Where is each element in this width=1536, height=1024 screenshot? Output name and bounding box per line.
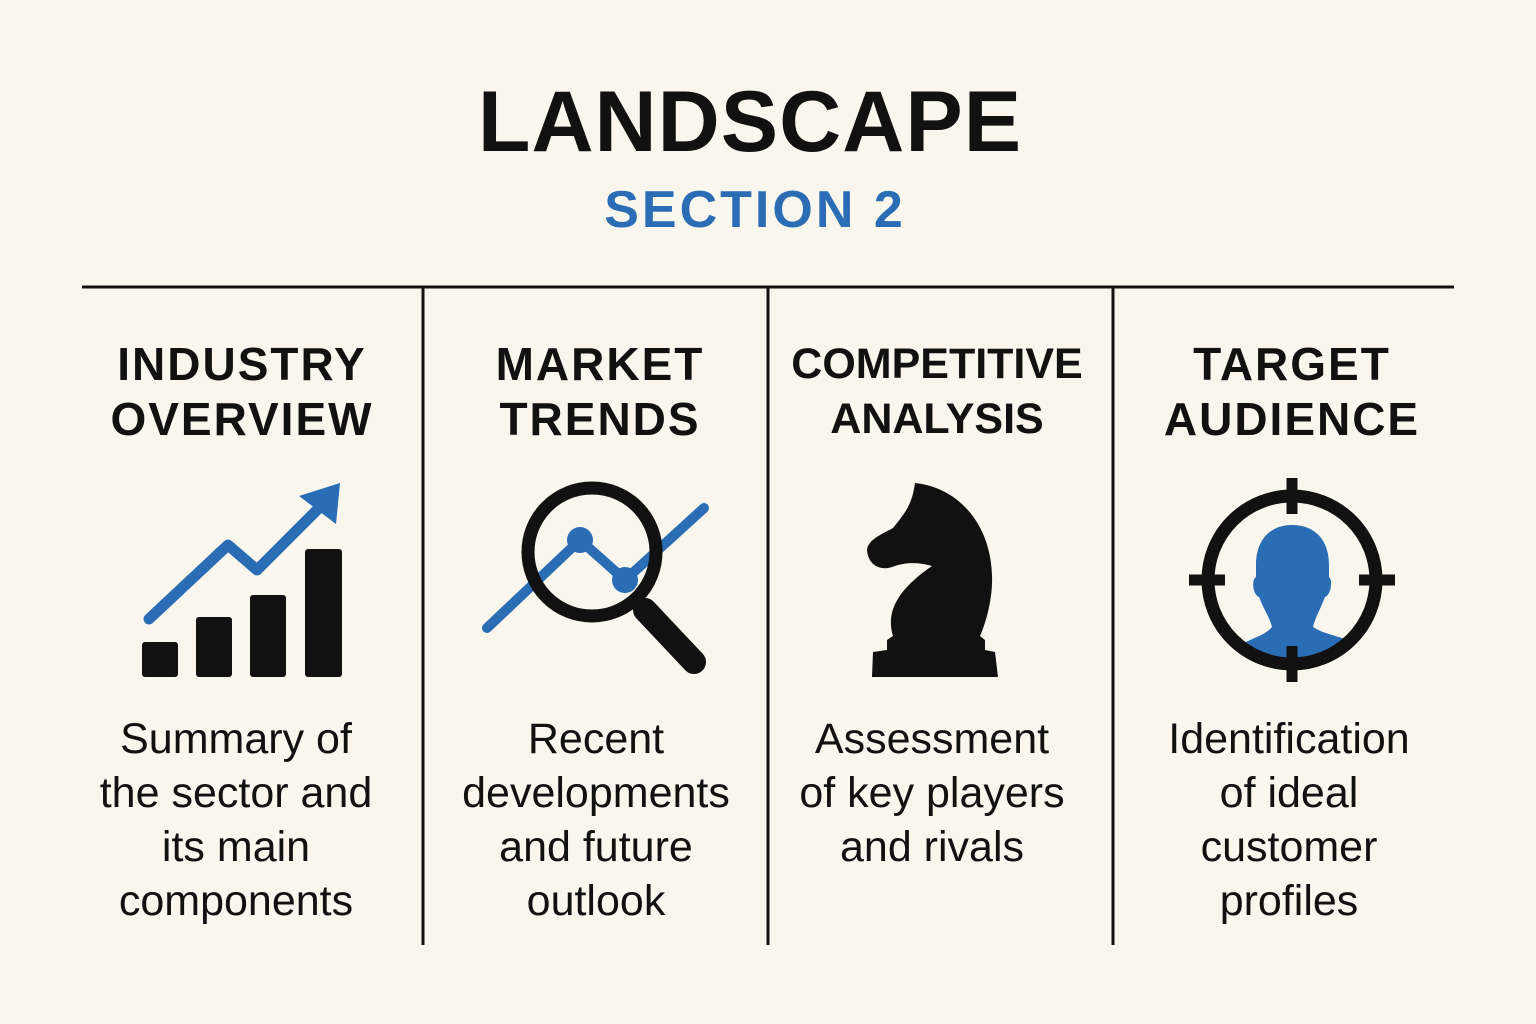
text: target audience: of ideal	[1220, 769, 1358, 817]
text: industry overview: Summary of	[120, 715, 352, 763]
text: competitive analysis: Assessment	[815, 715, 1049, 763]
subtitle: SECTION 2	[604, 181, 906, 239]
heading: target audience	[1164, 338, 1420, 445]
heading: target audience: TARGET	[1193, 338, 1391, 390]
heading: competitive analysis: ANALYSIS	[830, 395, 1044, 443]
text: target audience: profiles	[1220, 877, 1358, 925]
text: market trends: and future	[499, 823, 693, 871]
heading: market trends: MARKET	[496, 338, 704, 390]
icon: target audience	[1189, 478, 1395, 682]
text: industry overview	[100, 715, 372, 925]
heading: industry overview: OVERVIEW	[110, 393, 374, 445]
heading: market trends: TRENDS	[499, 393, 701, 445]
text: target audience: customer	[1201, 823, 1377, 871]
heading: competitive analysis	[791, 340, 1083, 443]
heading: industry overview: INDUSTRY	[117, 338, 367, 390]
text: target audience: Identification	[1168, 715, 1410, 763]
text: industry overview: the sector and	[100, 769, 372, 817]
text: industry overview: its main	[162, 823, 310, 871]
icon: chess knight	[867, 483, 998, 677]
heading: target audience: AUDIENCE	[1164, 393, 1420, 445]
text: market trends: developments	[462, 769, 730, 817]
text: target audience	[1168, 715, 1410, 925]
text: market trends	[462, 715, 730, 925]
text: competitive analysis: and rivals	[840, 823, 1024, 871]
text: market trends: Recent	[528, 715, 664, 763]
text: market trends: outlook	[527, 877, 665, 925]
heading: market trends	[496, 338, 704, 445]
text: competitive analysis	[799, 715, 1065, 871]
icon: growth chart	[142, 483, 342, 677]
heading: industry overview	[110, 338, 374, 445]
heading: competitive analysis: COMPETITIVE	[791, 340, 1083, 388]
title: LANDSCAPE	[478, 74, 1022, 170]
text: industry overview: components	[119, 877, 353, 925]
icon: magnifier trend	[482, 482, 709, 674]
text: competitive analysis: of key players	[799, 769, 1065, 817]
